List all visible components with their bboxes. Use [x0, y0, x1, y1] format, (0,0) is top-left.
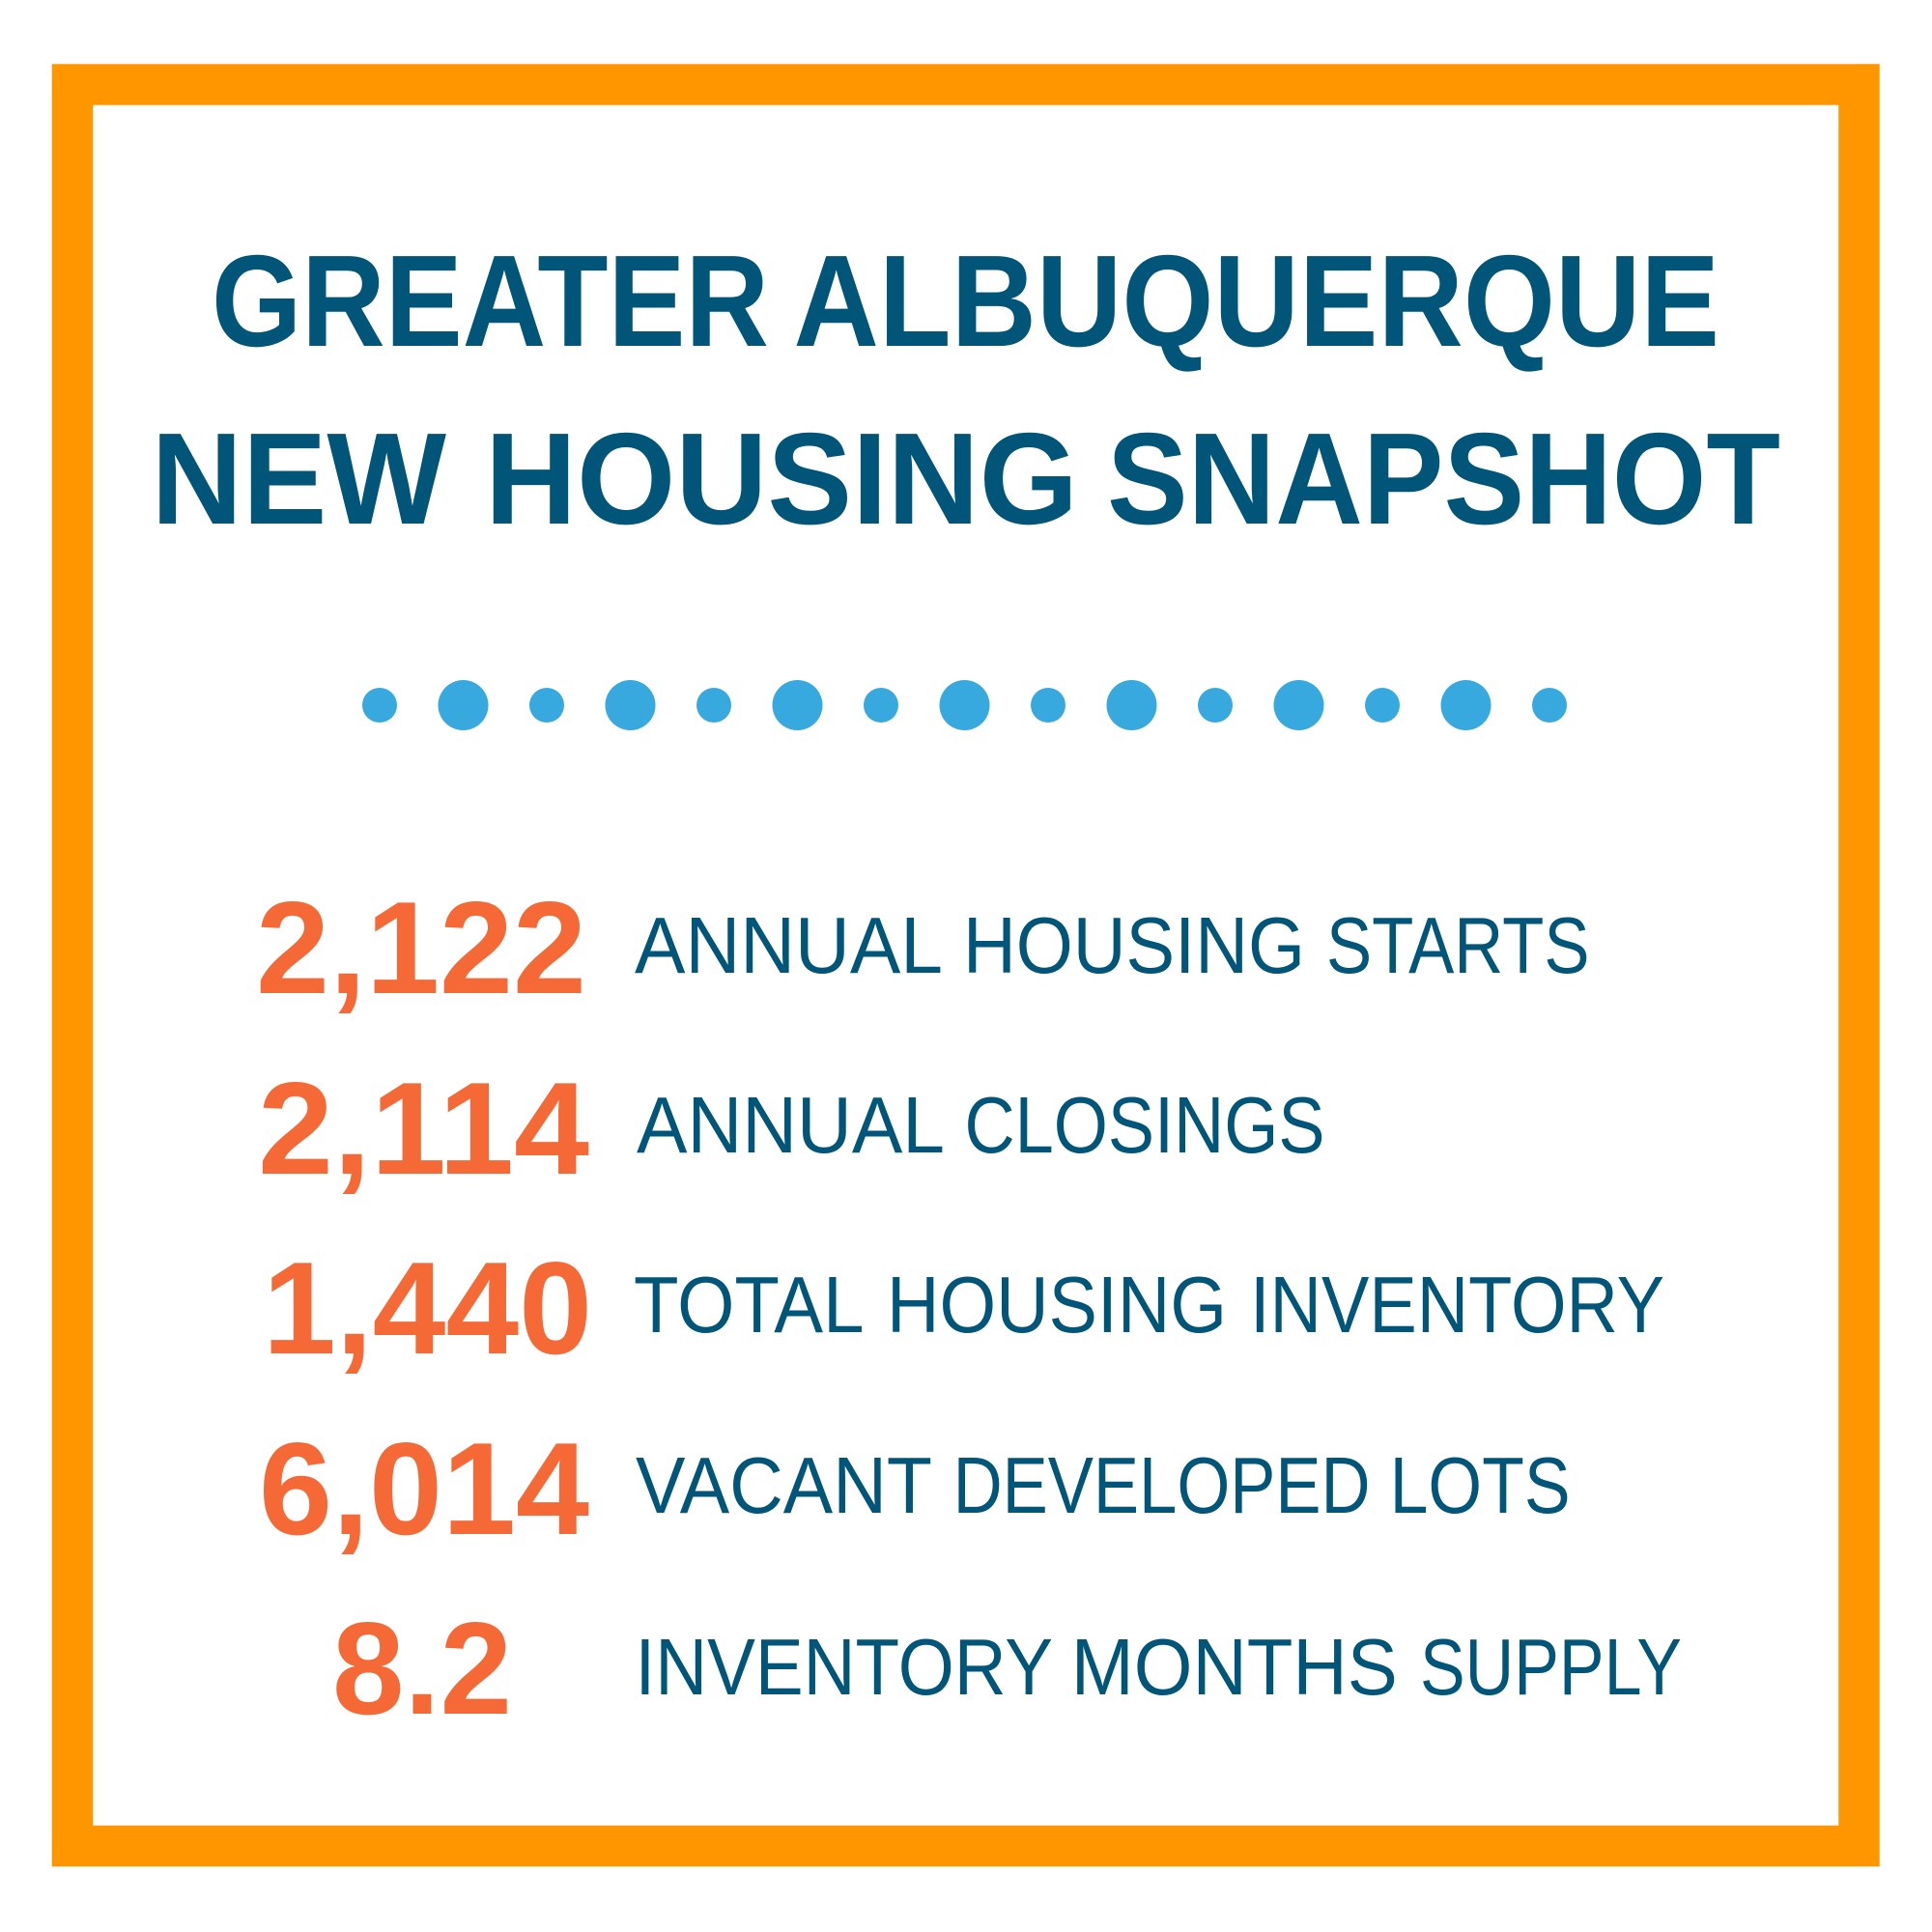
title: SNAPSHOT: [1107, 406, 1780, 552]
stat: inventory months supply: 8.2: [332, 1595, 512, 1742]
stat: annual housing starts: 2,122: [256, 874, 586, 1021]
stat: vacant developed lots: DEVELOPED: [953, 1440, 1371, 1530]
stat: vacant developed lots: VACANT: [636, 1440, 932, 1530]
stat: total housing inventory: TOTAL: [634, 1260, 864, 1350]
stat: inventory months supply: SUPPLY: [1420, 1622, 1682, 1712]
stat: vacant developed lots: [259, 1415, 1571, 1562]
stat: total housing inventory: 1,440: [263, 1235, 592, 1381]
stat: annual housing starts: STARTS: [1326, 900, 1590, 990]
stat: inventory months supply: [332, 1595, 1682, 1742]
title: GREATER: [212, 228, 769, 374]
stat: annual housing starts: HOUSING: [963, 900, 1305, 990]
title: HOUSING: [485, 406, 1078, 552]
stat: vacant developed lots: 6,014: [259, 1415, 589, 1562]
stat: annual closings: 2,114: [258, 1055, 589, 1202]
title: [151, 228, 1780, 552]
dotted divider: [362, 680, 1567, 730]
stat: annual closings: ANNUAL: [637, 1080, 945, 1170]
title: NEW: [151, 406, 447, 552]
stat: annual housing starts: ANNUAL: [635, 900, 943, 990]
stat: vacant developed lots: LOTS: [1390, 1440, 1571, 1530]
stat: annual housing starts: [256, 874, 1590, 1021]
stat: annual closings: CLOSINGS: [964, 1080, 1325, 1170]
stat: total housing inventory: INVENTORY: [1250, 1260, 1664, 1350]
title: ALBUQUERQUE: [794, 228, 1719, 374]
stat: inventory months supply: MONTHS: [1071, 1622, 1398, 1712]
stat: total housing inventory: [263, 1235, 1664, 1381]
stat: annual closings: [258, 1055, 1325, 1202]
stat: inventory months supply: INVENTORY: [636, 1622, 1053, 1712]
stat: total housing inventory: HOUSING: [887, 1260, 1227, 1350]
